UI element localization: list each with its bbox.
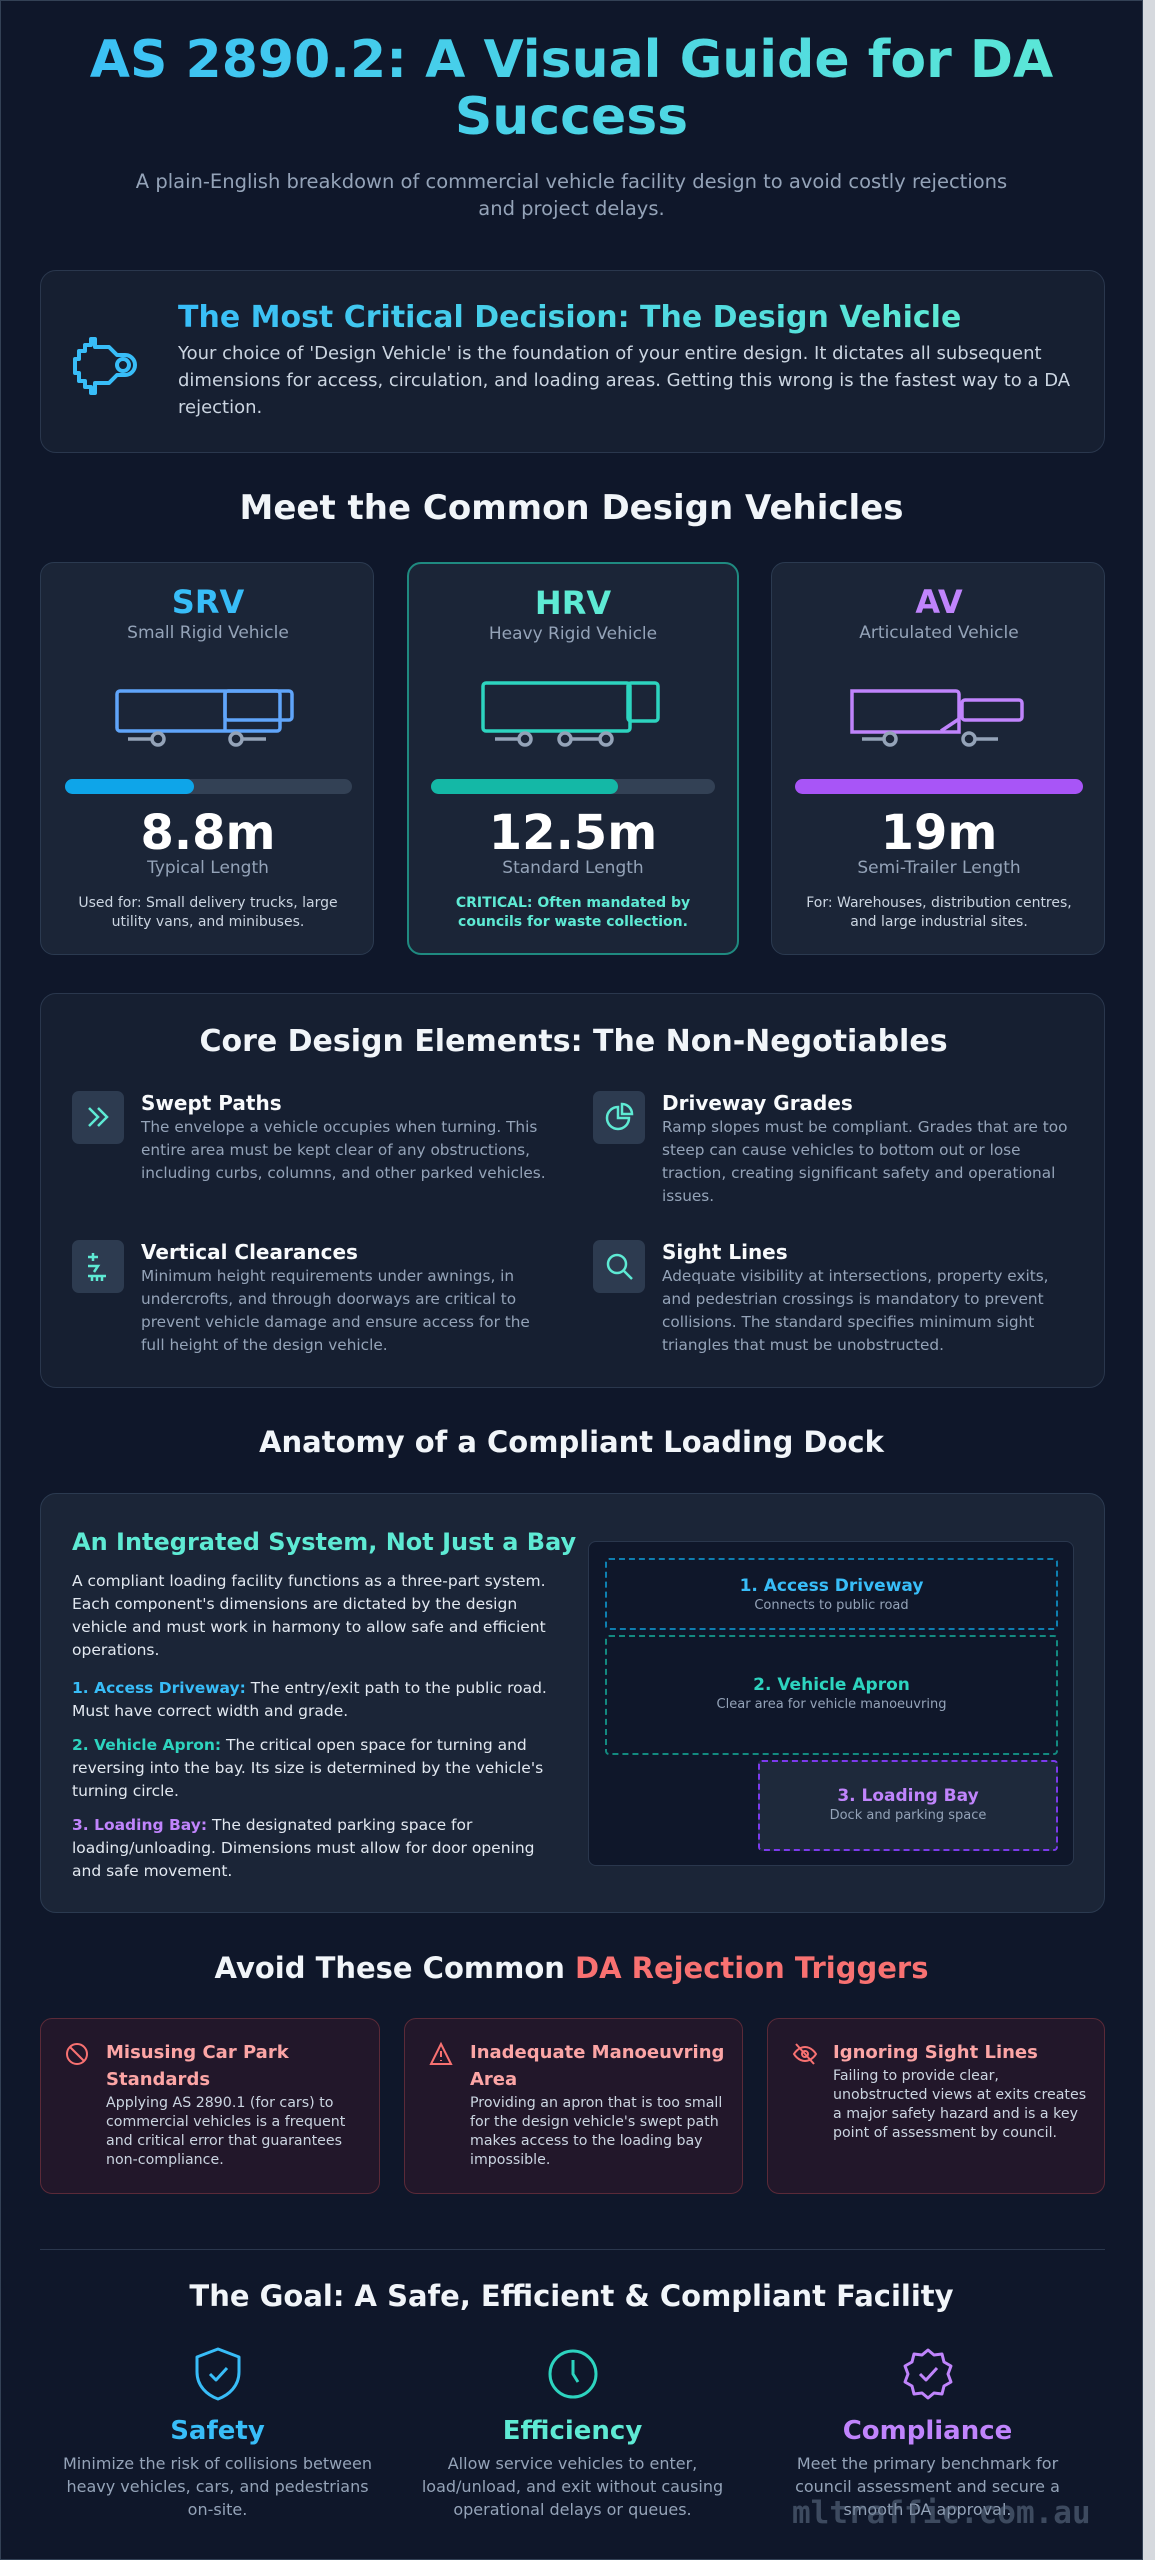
item: driveway grades: Driveway Grades [662, 1091, 853, 1115]
heading: rejection triggers: Avoid These Common DA Rejection Triggers [215, 1951, 928, 1985]
panel: trigger 1: Applying AS 2890.1 (for cars) to commercial vehicles is a frequent and critical error that guarantees non-compliance. [106, 2095, 345, 2168]
icon: AV truck [850, 689, 1024, 747]
zone: access driveway [605, 1558, 1058, 1630]
body: Your choice of 'Design Vehicle' is the foundation of your entire design. It dictates all subsequent dimensions for access, circulation, and loading areas. Getting this wrong is the fastest way to a DA rejection. [178, 343, 1070, 418]
item: driveway grades [593, 1091, 1067, 1205]
panel: AV [771, 562, 1105, 955]
zone: loading bay: Dock and parking space [830, 1808, 986, 1823]
panel: AV: Articulated Vehicle [859, 623, 1019, 643]
icon: engine [73, 337, 137, 395]
title: Success [455, 87, 688, 147]
panel: HRV: Standard Length [502, 858, 644, 878]
panel: SRV: 8.8m [140, 805, 276, 861]
item: swept paths [72, 1091, 546, 1182]
goal: efficiency: Allow service vehicles to enter, load/unload, and exit without causing operational delays or queues. [422, 2454, 723, 2519]
zone: loading bay: 3. Loading Bay [837, 1786, 979, 1806]
panel: HRV: Heavy Rigid Vehicle [489, 624, 657, 644]
watermark: mltraffic.com.au [792, 2495, 1091, 2531]
item: vertical clearances [72, 1240, 530, 1354]
panel: HRV: 12.5m [489, 805, 657, 861]
panel: HRV [407, 562, 739, 955]
item: sight lines [593, 1240, 1049, 1354]
panel: trigger 2: Providing an apron that is too small for the design vehicle's swept path makes access to the loading bay impossible. [470, 2095, 722, 2168]
goal: safety: Safety [170, 2416, 265, 2446]
zone: access driveway: Connects to public road [754, 1598, 909, 1613]
text block [72, 1572, 547, 1880]
panel: SRV [40, 562, 374, 955]
panel: HRV: CRITICAL: Often mandated by councils for waste collection. [456, 895, 690, 930]
panel: AV: AV [915, 583, 963, 621]
subtitle: A plain-English breakdown of commercial vehicle facility design to avoid costly rejections and project delays. [136, 170, 1007, 220]
diagram [588, 1541, 1074, 1866]
heading: The Most Critical Decision: The Design Vehicle [178, 300, 961, 335]
goal: compliance: Meet the primary benchmark for council assessment and secure a smooth DA approval. [795, 2454, 1060, 2519]
heading: vehicles: Meet the Common Design Vehicles [240, 488, 904, 528]
icon: SRV truck [115, 689, 294, 747]
panel: core design elements [40, 993, 1105, 1388]
right edge strip [1143, 0, 1155, 2560]
goal: efficiency: Efficiency [503, 2416, 642, 2446]
item: vertical clearances: Minimum height requirements under awnings, in undercrofts, and through doorways are critical to prevent vehicle damage and ensure access for the full height of the design vehicle. [141, 1267, 530, 1354]
panel: AV: For: Warehouses, distribution centres, and large industrial sites. [806, 895, 1072, 930]
zone: vehicle apron [605, 1635, 1058, 1755]
icon: HRV truck [481, 681, 660, 747]
icon: ban [66, 2043, 88, 2065]
item: sight lines: Adequate visibility at intersections, property exits, and pedestrian crossings is mandatory to prevent collisions. The standard specifies minimum sight triangles that must be unobstructed. [662, 1267, 1049, 1354]
panel: SRV: Small Rigid Vehicle [127, 623, 289, 643]
text block: A compliant loading facility functions as a three-part system. Each component's dimensions are dictated by the design vehicle and must work in harmony to allow safe and efficient operations. [72, 1572, 546, 1659]
title: AS 2890.2: A Visual Guide for DA [90, 30, 1053, 90]
panel: trigger 1: Misusing Car Park Standards [106, 2042, 289, 2090]
icon: warning [429, 2042, 453, 2065]
item: swept paths: The envelope a vehicle occupies when turning. This entire area must be kept clear of any obstructions, including curbs, columns, and other parked vehicles. [141, 1118, 546, 1182]
panel: trigger 3: Ignoring Sight Lines [833, 2042, 1038, 2063]
panel: trigger 1 [40, 2018, 380, 2194]
item: sight lines: Sight Lines [662, 1240, 788, 1264]
heading: goal: The Goal: A Safe, Efficient & Compliant Facility [189, 2279, 954, 2313]
panel: loading dock [40, 1493, 1105, 1913]
title [0, 32, 1143, 146]
panel: trigger 3: Failing to provide clear, unobstructed views at exits creates a major safety hazard and is a key point of assessment by council. [833, 2068, 1086, 2141]
text block: 1. Access Driveway: The entry/exit path to the public road. Must have correct width and grade. [72, 1679, 547, 1720]
goal: compliance: Compliance [843, 2416, 1012, 2446]
heading: anatomy: Anatomy of a Compliant Loading Dock [259, 1425, 884, 1459]
heading: Core Design Elements: The Non-Negotiables [199, 1024, 948, 1059]
panel: SRV: SRV [172, 583, 244, 621]
panel: trigger 2 [404, 2018, 743, 2194]
panel: AV: Semi-Trailer Length [857, 858, 1021, 878]
zone: loading bay [758, 1760, 1058, 1851]
text block: 2. Vehicle Apron: The critical open space for turning and reversing into the bay. Its size is determined by the vehicle's turning circle. [72, 1736, 543, 1800]
panel: SRV: Used for: Small delivery trucks, large utility vans, and minibuses. [78, 895, 338, 930]
zone: vehicle apron: 2. Vehicle Apron [753, 1675, 910, 1695]
panel: SRV: Typical Length [147, 858, 269, 878]
goal: efficiency [422, 2350, 723, 2519]
icon: eye-off [792, 2043, 818, 2065]
zone: access driveway: 1. Access Driveway [740, 1576, 923, 1596]
goal: safety [63, 2348, 372, 2519]
item: vertical clearances: Vertical Clearances [141, 1240, 358, 1264]
panel: HRV: HRV [535, 584, 611, 622]
zone: vehicle apron: Clear area for vehicle manoeuvring [717, 1697, 946, 1712]
goal: compliance [795, 2348, 1060, 2519]
text block: 3. Loading Bay: The designated parking space for loading/unloading. Dimensions must allow for door opening and safe movement. [72, 1816, 535, 1880]
panel: trigger 2: Inadequate Manoeuvring Area [470, 2042, 724, 2090]
panel: AV: 19m [881, 805, 997, 861]
item: driveway grades: Ramp slopes must be compliant. Grades that are too steep can cause vehicles to bottom out or lose traction, creating significant safety and operational issues. [662, 1118, 1067, 1205]
goal: safety: Minimize the risk of collisions between heavy vehicles, cars, and pedestrians on-site. [63, 2454, 372, 2519]
item: swept paths: Swept Paths [141, 1091, 282, 1115]
panel: trigger 3 [767, 2018, 1105, 2194]
panel: critical decision [40, 270, 1105, 453]
heading: An Integrated System, Not Just a Bay [72, 1528, 576, 1556]
